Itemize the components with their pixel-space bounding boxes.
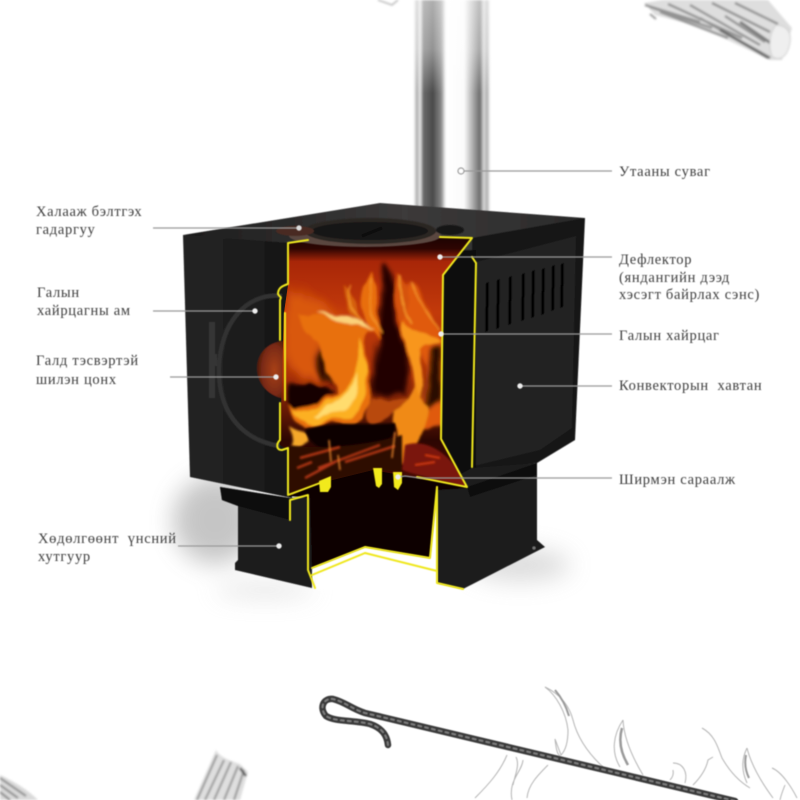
large orange flame: [288, 312, 373, 428]
stove top plate: [183, 203, 585, 250]
callout labels: [36, 164, 762, 565]
central dark column: [370, 262, 406, 395]
stove body: [183, 203, 585, 590]
label: cooking surface: Халааж бэлтгэх: [36, 204, 142, 220]
right convector panel: [472, 218, 585, 470]
white notch: [314, 554, 437, 590]
sketch: fire poker: [322, 699, 735, 800]
centre flame tongues: [361, 272, 378, 338]
chimney pipe: [412, 0, 492, 222]
charred logs: [305, 423, 395, 453]
label: ash pan: хутгуур: [38, 549, 91, 565]
sketch: log bottom left: [194, 750, 248, 800]
right flames: [400, 281, 444, 430]
leader: glass window: [170, 374, 279, 380]
leader: chimney: [458, 168, 612, 174]
label: glass window: Галд тэсвэртэй: [36, 353, 139, 369]
leader: firebox: [438, 331, 612, 337]
label: deflector: (яндангийн дээд: [619, 270, 730, 286]
cavity background: [278, 236, 474, 491]
label: firebox: Галын хайрцаг: [619, 328, 720, 344]
leader: ash pan: [178, 543, 282, 549]
door handle: [209, 322, 217, 398]
leader: cooking surface: [153, 225, 302, 231]
inner wall between firebox and convector: [438, 250, 476, 490]
label: deflector: хэсэгт байрлах сэнс): [619, 287, 760, 303]
lower flames: [370, 395, 408, 425]
label: deflector: Дефлектор: [619, 252, 692, 268]
yellow flame core: [291, 340, 368, 425]
ash chamber: [288, 466, 470, 568]
base left leg: [220, 487, 312, 588]
label: firebox door: Галын: [37, 285, 80, 301]
leader: grate: [395, 474, 612, 480]
sketch: log top right: [378, 0, 792, 60]
flame layer: [284, 262, 444, 462]
refractory glass window: [257, 341, 286, 399]
leader: convector panel: [517, 383, 612, 389]
fine bright wisps: [352, 275, 442, 332]
base right leg: [437, 463, 545, 589]
leader lines and markers: [153, 168, 612, 549]
sketch: log corner: [0, 775, 38, 800]
sketch: flames: [475, 687, 797, 800]
label: cooking surface: гадаргуу: [36, 222, 96, 238]
label: glass window: шилэн цонх: [36, 372, 117, 388]
left orange haze: [284, 289, 351, 381]
leader: deflector: [437, 254, 612, 260]
ventilation slots: [485, 263, 564, 332]
label: chimney: Утааны суваг: [619, 164, 711, 180]
label: convector panel: Конвекторын хавтан: [619, 378, 762, 394]
left door face: [183, 235, 292, 498]
fire chamber: [278, 236, 474, 497]
glowing embers: [297, 445, 395, 478]
label: firebox door: хайрцагны ам: [37, 303, 131, 319]
label: ash pan: Хөдөлгөөнт үнсний: [38, 531, 177, 547]
grate teeth: [319, 468, 402, 492]
stove shadow: [173, 476, 570, 597]
door ring: [219, 296, 282, 446]
label: grate: Ширмэн сараалж: [619, 472, 736, 488]
yellow cut-away outline: [277, 237, 476, 589]
hot plate: [276, 218, 464, 247]
leader: firebox door: [153, 308, 258, 314]
